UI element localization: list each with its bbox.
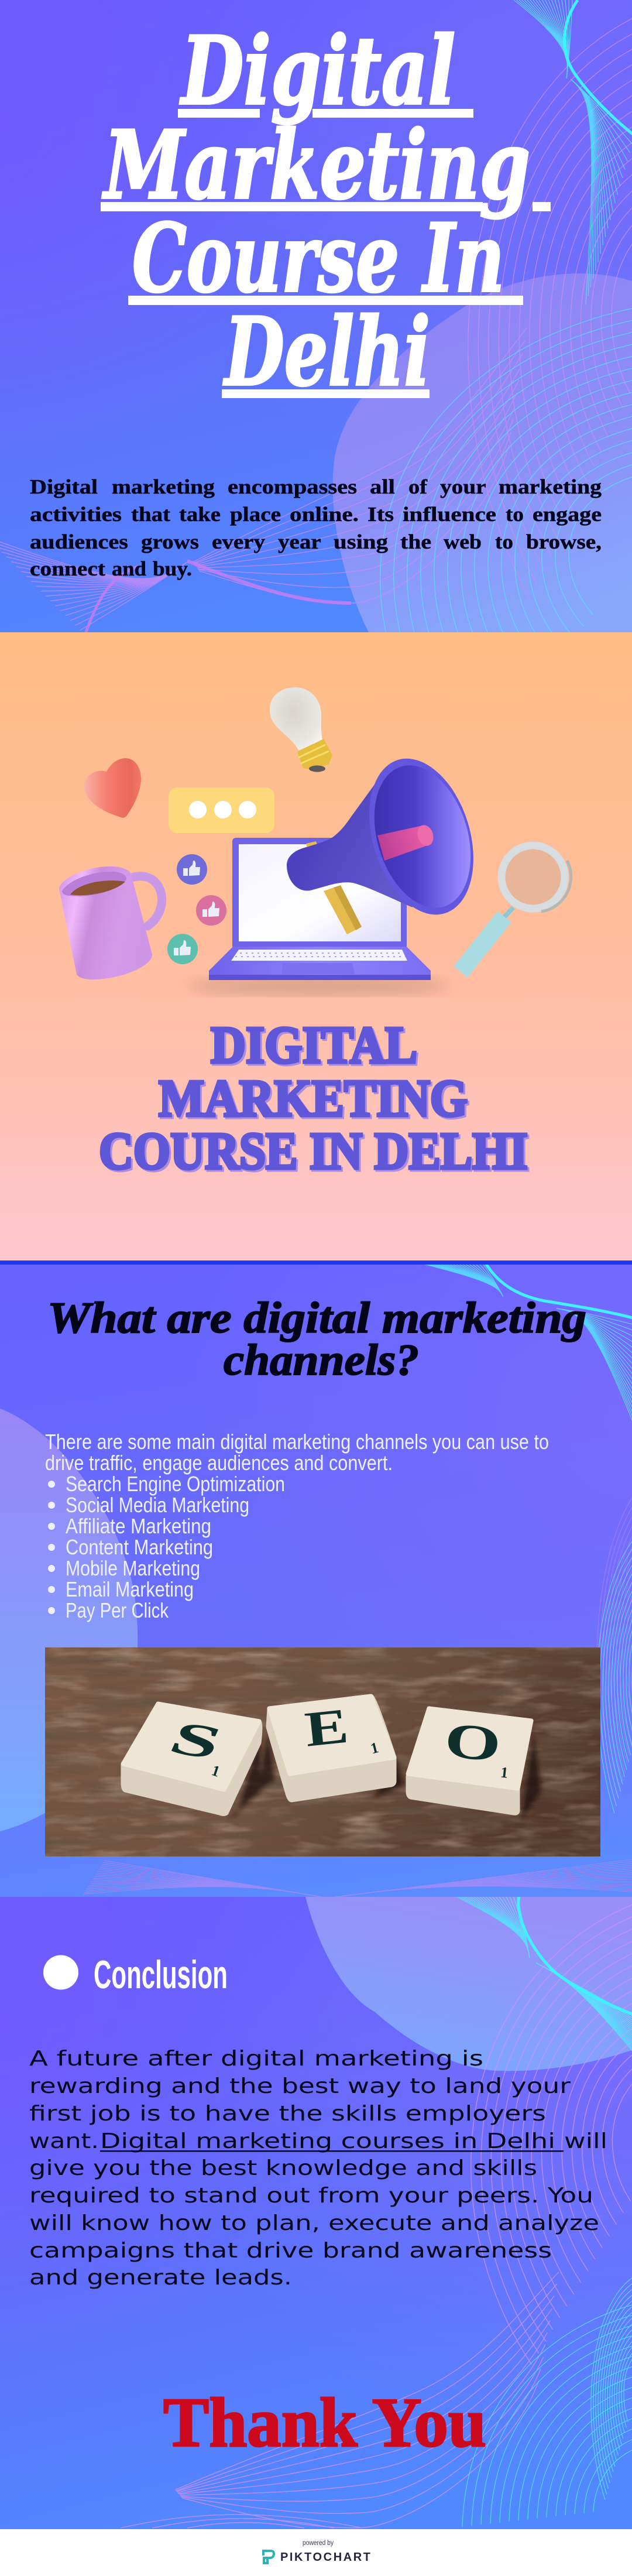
title: Digital Marketing Course In Delhi: Delhi <box>223 297 430 407</box>
icon: heart <box>84 758 141 818</box>
heading: Digital Marketing Course In Delhi: MARKETING <box>159 1070 468 1128</box>
channels intro text: There are some main digital marketing channels you can use to <box>45 1430 549 1454</box>
photo: SEO letter tiles on wood: 1 <box>500 1763 509 1782</box>
conclusion paragraph: Digital marketing courses in Delhi <box>100 2129 555 2153</box>
intro paragraph: grows <box>141 530 199 553</box>
panel: digital marketing channels <box>0 1258 632 1939</box>
footer: powered by Piktochart <box>0 2529 632 2576</box>
thank you message: Thank You <box>163 2383 486 2461</box>
photo: SEO letter tiles on wood: 1 <box>209 1762 222 1780</box>
hero background gradient <box>0 0 632 632</box>
intro paragraph: encompasses <box>228 475 357 498</box>
intro paragraph: your <box>440 475 486 498</box>
conclusion paragraph: A future after digital marketing is <box>29 2047 483 2071</box>
channels bullet list: Mobile Marketing <box>66 1556 200 1580</box>
intro paragraph: year <box>278 530 321 553</box>
intro paragraph: activities <box>30 503 122 526</box>
photo: SEO letter tiles on wood <box>45 1647 600 1856</box>
icon: teal like badge <box>167 934 198 964</box>
channels bullet list: Affiliate Marketing <box>66 1514 211 1538</box>
intro paragraph: influence <box>403 503 496 526</box>
channels bullet list: Email Marketing <box>66 1577 194 1601</box>
heading: Conclusion: Conclusion <box>94 1952 228 1997</box>
icon: laptop <box>187 838 451 995</box>
conclusion paragraph: rewarding and the best way to land your <box>29 2074 571 2098</box>
intro paragraph: that <box>131 503 170 526</box>
channels bullet list: Social Media Marketing <box>66 1493 249 1517</box>
intro paragraph: all <box>370 475 395 498</box>
channels bullet list: Content Marketing <box>66 1535 213 1559</box>
conclusion paragraph <box>29 2047 607 2290</box>
conclusion paragraph: campaigns that drive brand awareness <box>29 2239 552 2263</box>
channels bullet list <box>48 1472 285 1622</box>
intro paragraph: marketing <box>499 475 602 498</box>
heading: What are digital marketing channels?: channels? <box>224 1336 419 1385</box>
icon: light bulb <box>270 687 332 772</box>
intro paragraph: place <box>230 503 281 526</box>
intro paragraph: online. <box>290 503 359 526</box>
icon: pink like badge <box>196 895 226 926</box>
conclusion paragraph: first job is to have the skills employers <box>29 2102 546 2126</box>
intro paragraph: web <box>444 530 482 553</box>
icon: blue like badge <box>177 854 207 885</box>
title: Digital Marketing Course In Delhi: Course In <box>132 203 504 313</box>
icon: chat bubble <box>169 787 274 833</box>
peach background <box>0 632 632 1260</box>
photo: SEO letter tiles on wood: E <box>303 1698 351 1758</box>
footer: powered by Piktochart: powered by <box>303 2540 334 2547</box>
icon: magnifying glass <box>461 845 571 972</box>
conclusion paragraph: and generate leads. <box>29 2266 292 2290</box>
intro paragraph: and <box>112 557 147 580</box>
icon: Piktochart logo <box>263 2551 274 2564</box>
channels bullet list: Pay Per Click <box>66 1598 169 1622</box>
heading: What are digital marketing channels?: What are digital marketing <box>47 1294 586 1342</box>
intro paragraph: every <box>212 530 266 553</box>
heading: Digital Marketing Course In Delhi: DIGITAL <box>211 1016 417 1074</box>
intro paragraph: buy. <box>153 557 192 580</box>
panel: illustration on peach background <box>0 632 632 1260</box>
intro paragraph: take <box>179 503 221 526</box>
heading: Digital Marketing Course In Delhi: COURSE IN DELHI <box>99 1122 528 1180</box>
intro paragraph: audiences <box>30 530 128 553</box>
conclusion paragraph: required to stand out from your peers. You <box>29 2184 593 2208</box>
panel: hero <box>0 0 632 778</box>
intro paragraph: the <box>400 530 431 553</box>
title: Digital Marketing Course In Delhi <box>101 16 551 407</box>
conclusion background <box>0 1885 632 2529</box>
intro paragraph: engage <box>533 503 602 526</box>
intro paragraph: marketing <box>112 475 215 498</box>
channels bullet list: Search Engine Optimization <box>66 1472 285 1496</box>
intro paragraph: Its <box>367 503 394 526</box>
heading: Digital Marketing Course In Delhi <box>99 1016 528 1180</box>
panel: conclusion <box>0 1885 632 2529</box>
photo: SEO letter tiles on wood: O <box>442 1712 504 1772</box>
conclusion paragraph: will know how to plan, execute and analyze <box>29 2211 599 2235</box>
intro paragraph: browse, <box>526 530 602 553</box>
photo: SEO letter tiles on wood: S <box>162 1711 231 1769</box>
channels intro text <box>45 1430 549 1475</box>
footer: powered by Piktochart: PIKTOCHART <box>280 2551 370 2564</box>
intro paragraph: to <box>506 503 524 526</box>
title: Digital Marketing Course In Delhi: Digital <box>180 16 455 126</box>
channels intro text: drive traffic, engage audiences and convert. <box>45 1451 393 1475</box>
icon: coffee mug <box>59 866 162 979</box>
icon: megaphone <box>287 746 491 934</box>
conclusion paragraph: want. <box>29 2129 99 2153</box>
intro paragraph: to <box>495 530 513 553</box>
intro paragraph: connect <box>30 557 105 580</box>
conclusion paragraph: give you the best knowledge and skills <box>29 2156 537 2180</box>
intro paragraph: of <box>408 475 427 498</box>
photo: SEO letter tiles on wood: 1 <box>369 1739 380 1757</box>
conclusion paragraph: will <box>564 2129 607 2153</box>
intro paragraph: Digital <box>30 475 98 498</box>
heading: What are digital marketing channels? <box>47 1294 586 1385</box>
channels background <box>0 1258 632 1939</box>
intro paragraph: using <box>334 530 389 553</box>
icon: white dot <box>43 1955 78 1989</box>
